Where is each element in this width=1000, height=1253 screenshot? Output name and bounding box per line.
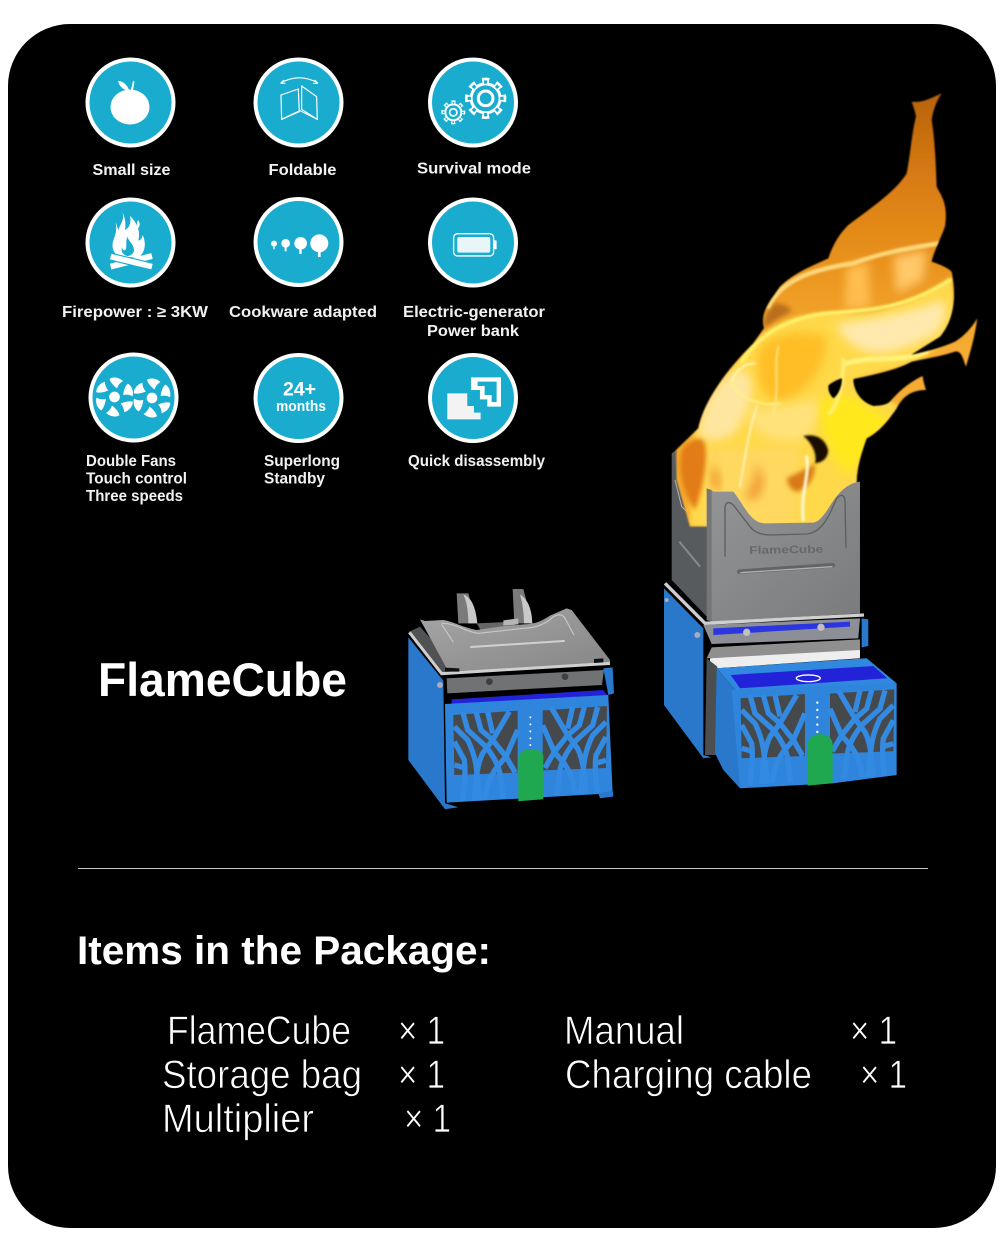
heading: items in the package: Items in the Package:	[77, 929, 491, 973]
label: survival mode: Survival mode	[417, 160, 531, 178]
icon: double fans	[90, 354, 176, 440]
label: quick disassembly: Quick disassembly	[408, 453, 545, 470]
product: stove left panel	[672, 450, 712, 622]
package list: × 1	[398, 1009, 445, 1053]
label: double fans, touch control, three speeds	[86, 453, 187, 505]
icon: 24+ months	[256, 355, 342, 441]
package list: × 1	[860, 1053, 907, 1097]
icon: firepower campfire	[88, 200, 174, 286]
icon: small size apple	[88, 60, 174, 146]
package list: × 1	[398, 1053, 445, 1097]
label: superlong standby	[264, 453, 340, 488]
package list	[162, 1009, 907, 1141]
label: cookware adapted: Cookware adapted	[229, 304, 377, 321]
label: double fans, touch control, three speeds: Three speeds	[86, 488, 183, 505]
package list: × 1	[850, 1009, 897, 1053]
label: electric-generator power bank: Electric-generator	[403, 304, 545, 321]
icon: power bank battery	[430, 200, 516, 286]
product: closed cube	[408, 589, 614, 809]
divider	[78, 868, 928, 869]
product: open stove cube: FlameCube	[749, 544, 823, 557]
label: electric-generator power bank	[403, 304, 545, 340]
label: small size: Small size	[92, 162, 171, 179]
label: double fans, touch control, three speeds: Touch control	[86, 470, 187, 488]
package list: FlameCube	[167, 1009, 351, 1053]
label: firepower: Firepower : ≥ 3KW	[62, 304, 209, 321]
package list: × 1	[404, 1097, 451, 1141]
flame	[670, 90, 983, 530]
label: electric-generator power bank: Power bank	[427, 323, 519, 340]
label: double fans, touch control, three speeds: Double Fans	[86, 453, 176, 470]
icon: foldable	[256, 60, 342, 146]
label: superlong standby: Superlong	[264, 453, 340, 470]
icon: survival mode gears	[430, 60, 516, 146]
product title: FlameCube	[98, 653, 347, 706]
package list: Multiplier	[162, 1097, 314, 1141]
package list: Manual	[564, 1009, 684, 1053]
icon: 24+ months: months	[276, 399, 326, 415]
product: open stove cube	[664, 482, 897, 790]
label: superlong standby: Standby	[264, 470, 325, 488]
icon: cookware adapted	[256, 199, 342, 285]
package list: Storage bag	[162, 1053, 362, 1097]
icon: quick disassembly	[430, 355, 516, 441]
icon: 24+ months: 24+	[283, 380, 316, 400]
package list: Charging cable	[565, 1053, 812, 1097]
label: foldable: Foldable	[268, 162, 337, 179]
